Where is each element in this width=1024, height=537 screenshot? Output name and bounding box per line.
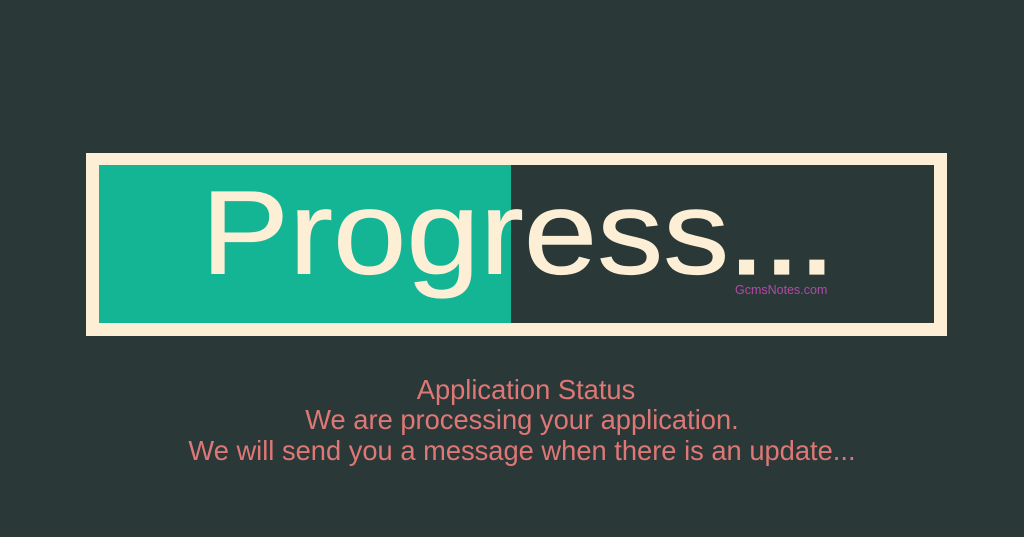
watermark: GcmsNotes.com — [735, 283, 827, 297]
status heading: Application Status — [417, 374, 635, 405]
progress bar frame — [86, 153, 947, 336]
progress bar fill — [99, 165, 511, 323]
status text block — [188, 374, 856, 466]
status message line 1: We are processing your application. — [305, 404, 739, 435]
status message line 2: We will send you a message when there is an update... — [188, 435, 856, 466]
title: Progress...: Progress... — [201, 166, 834, 299]
